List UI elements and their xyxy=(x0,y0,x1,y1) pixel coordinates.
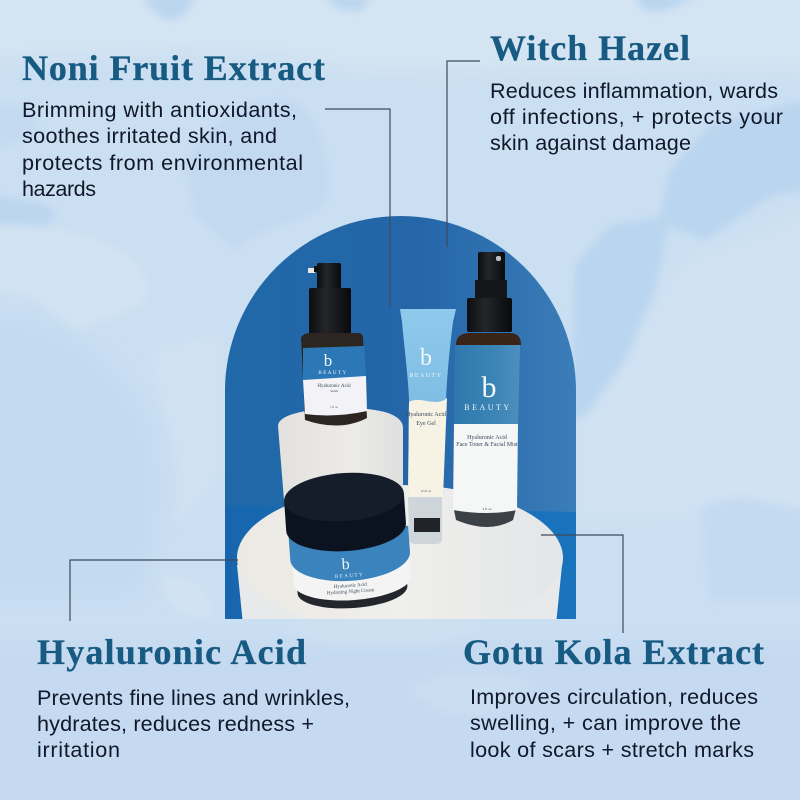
serum label text xyxy=(317,351,351,409)
text block: witch hazel: off infections, + protects your xyxy=(490,104,783,129)
bottom patches xyxy=(410,674,530,715)
text block: noni fruit extract: Noni Fruit Extract xyxy=(22,48,325,88)
tube label text: Eye Gel xyxy=(416,421,436,427)
text block: witch hazel: Witch Hazel xyxy=(490,28,690,68)
text block: noni fruit extract: soothes irritated skin, and xyxy=(22,123,277,148)
leader line: hyaluronic acid xyxy=(70,560,238,621)
serum label text: BEAUTY xyxy=(318,371,348,376)
tube label text: BEAUTY xyxy=(409,373,443,379)
text block: noni fruit extract xyxy=(22,48,325,201)
mist label text xyxy=(456,371,518,511)
text block: hyaluronic acid: Hyaluronic Acid xyxy=(37,632,306,672)
tube label text: b xyxy=(420,345,432,371)
top edge blots xyxy=(142,0,200,20)
white cloud left xyxy=(0,225,147,330)
leader line: gotu kola extract xyxy=(541,535,623,633)
mist label text: BEAUTY xyxy=(464,403,512,412)
right lower xyxy=(700,499,800,600)
serum label text: 1 fl oz xyxy=(330,405,338,409)
tube label text: 0.5 fl oz xyxy=(421,489,432,493)
text block: gotu kola extract xyxy=(463,632,764,762)
text block: noni fruit extract: hazards xyxy=(22,176,96,201)
mist label text: 4 fl oz xyxy=(483,507,492,511)
product photo in arch xyxy=(225,216,576,631)
mist spray bottle xyxy=(453,252,521,527)
blue arch backdrop xyxy=(225,216,576,512)
large white pedestal xyxy=(237,485,563,631)
jar label text: BEAUTY xyxy=(335,573,364,580)
text block: hyaluronic acid xyxy=(37,632,350,762)
text block: witch hazel xyxy=(490,28,783,155)
pump serum bottle xyxy=(301,263,367,426)
mid blots xyxy=(0,102,40,150)
eye gel tube xyxy=(400,309,456,544)
tube label text: Hyaluronic Acid xyxy=(406,412,446,418)
serum label text: b xyxy=(324,351,332,370)
mist label text: Hyaluronic Acid xyxy=(467,435,507,441)
jar label text: b xyxy=(341,556,350,573)
jar label text xyxy=(326,558,374,596)
small white pedestal xyxy=(278,408,403,500)
text block: hyaluronic acid: hydrates, reduces redness + xyxy=(37,711,314,736)
text block: gotu kola extract: Gotu Kola Extract xyxy=(463,632,764,672)
leader line: witch hazel xyxy=(447,61,480,247)
text block: gotu kola extract: swelling, + can improve the xyxy=(470,710,741,735)
text block: hyaluronic acid: Prevents fine lines and wrinkles, xyxy=(37,685,350,710)
text block: witch hazel: skin against damage xyxy=(490,130,691,155)
text block: noni fruit extract: protects from environmental xyxy=(22,150,303,175)
mist label text: b xyxy=(482,371,496,404)
text block: gotu kola extract: look of scars + stretch marks xyxy=(470,737,754,762)
text block: hyaluronic acid: irritation xyxy=(37,737,120,762)
mist label text: Face Toner & Facial Mist xyxy=(456,442,518,448)
leader line: noni fruit extract xyxy=(325,109,390,307)
serum label text: Hyaluronic Acid xyxy=(317,384,351,389)
serum label text: Serum xyxy=(330,389,339,393)
tube label text xyxy=(406,345,446,493)
text block: gotu kola extract: Improves circulation, reduces xyxy=(470,684,758,709)
text block: witch hazel: Reduces inflammation, wards xyxy=(490,78,778,103)
jar label text: Hydrating Night Cream xyxy=(327,588,375,597)
text block: noni fruit extract: Brimming with antioxidants, xyxy=(22,97,297,122)
night cream jar xyxy=(282,469,414,612)
jar label text: Hyaluronic Acid xyxy=(334,583,367,590)
